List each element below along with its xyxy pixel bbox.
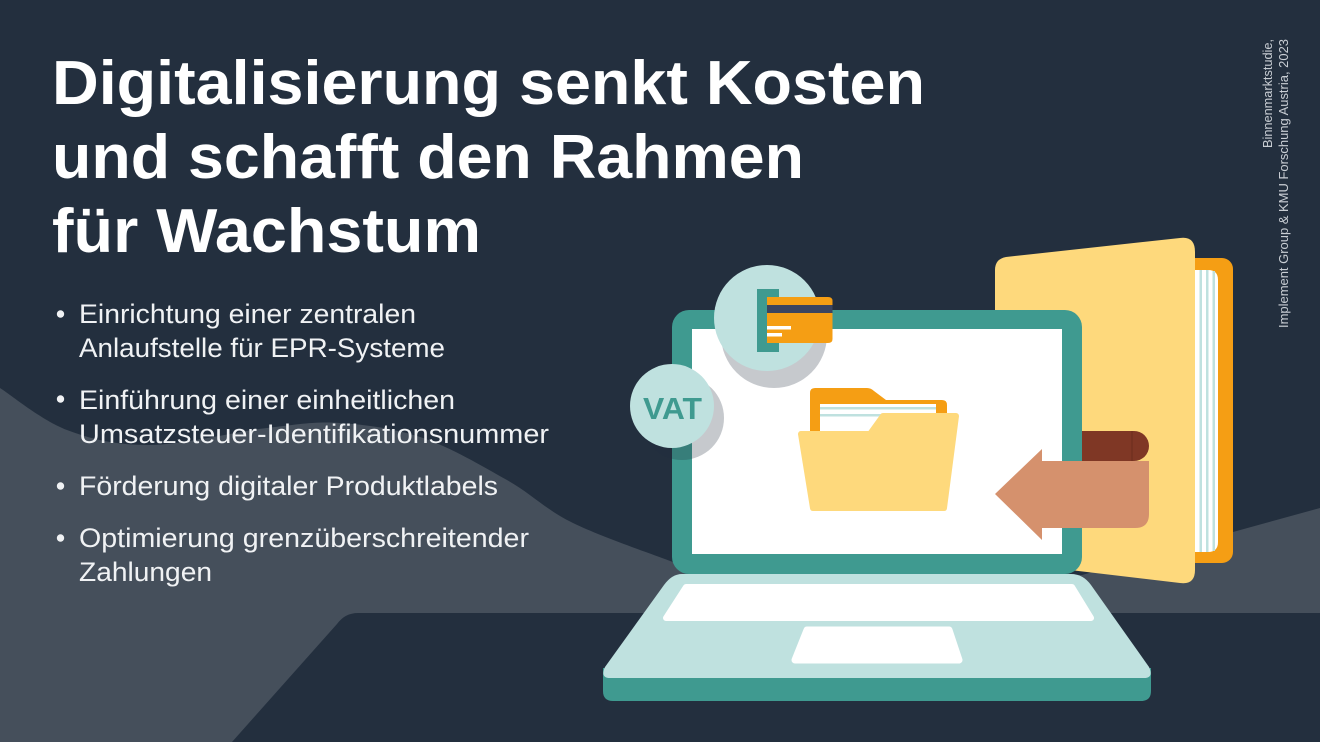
laptop base <box>603 574 1151 701</box>
bullet 1 <box>57 299 445 363</box>
bullet 3: Förderung digitaler Produktlabels <box>79 471 498 501</box>
folder front cover <box>995 238 1195 583</box>
icon: credit card circle <box>714 265 832 388</box>
bullet list <box>57 299 549 587</box>
bullet 2: Einführung einer einheitlichen <box>79 385 455 415</box>
keyboard <box>666 587 1091 618</box>
bullet 1: Einrichtung einer zentralen <box>79 299 416 329</box>
bullet 1: Anlaufstelle für EPR-Systeme <box>79 333 445 363</box>
title: und schafft den Rahmen <box>52 123 804 192</box>
folder pages <box>1190 270 1218 552</box>
bullet 2: Umsatzsteuer-Identifikationsnummer <box>79 419 549 449</box>
background wave shape <box>0 388 1320 742</box>
title <box>52 49 925 266</box>
icon: VAT circle <box>630 364 724 460</box>
bullet 2 <box>57 385 549 449</box>
icon: large open folder with pages <box>995 238 1233 583</box>
icon: VAT circle: VAT <box>643 391 702 426</box>
laptop screen <box>672 310 1082 574</box>
source note: Binnenmarktstudie, <box>1261 39 1275 148</box>
bullet 4: Optimierung grenzüberschreitender <box>79 523 529 553</box>
title: für Wachstum <box>52 197 481 266</box>
bullet 4: Zahlungen <box>79 557 212 587</box>
icon: small folder on screen <box>801 388 956 508</box>
title: Digitalisierung senkt Kosten <box>52 49 925 118</box>
bullet 4 <box>57 523 529 587</box>
folder back cover <box>1150 258 1233 563</box>
arrow pointing to the laptop <box>995 431 1149 540</box>
source note <box>1261 39 1291 328</box>
trackpad <box>795 630 959 660</box>
source note: Implement Group & KMU Forschung Austria, 2023 <box>1277 39 1291 328</box>
